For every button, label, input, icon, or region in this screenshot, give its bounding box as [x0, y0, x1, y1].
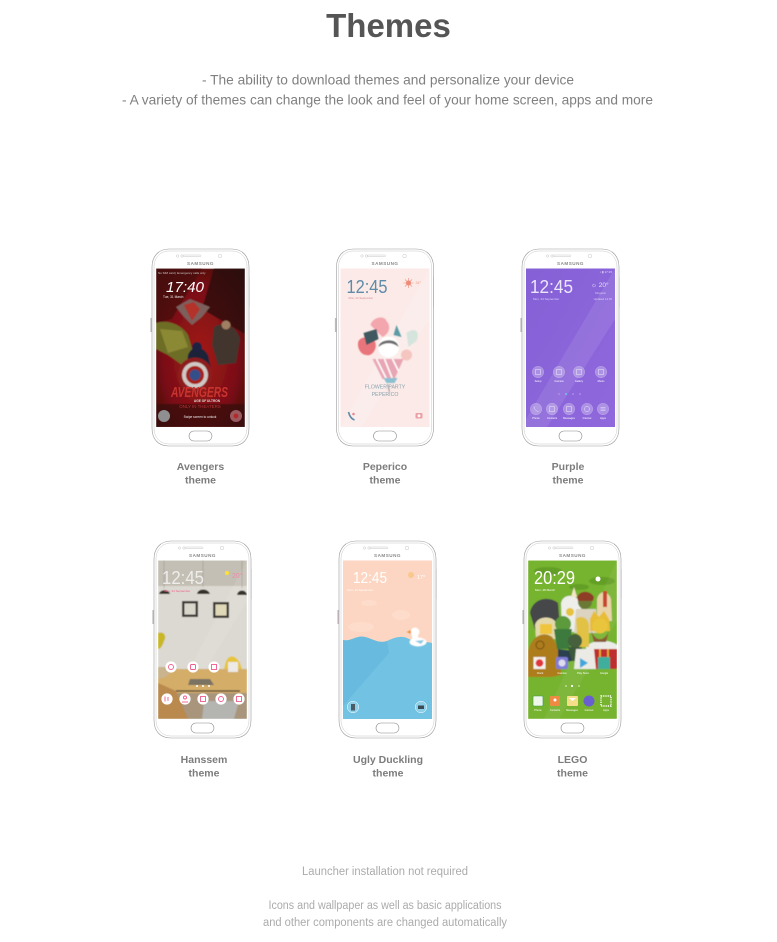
label: Purple theme: theme: [553, 474, 584, 486]
phone: Avengers theme: Swipe screen to unlock: [184, 415, 217, 419]
phone: Purple theme: Internet: [583, 416, 592, 420]
label: Avengers theme: Avengers: [177, 461, 224, 473]
intro text: - The ability to download themes and personalize your device: [202, 72, 574, 88]
grey robot: [530, 599, 560, 633]
intro text: - A variety of themes can change the look and feel of your home screen, apps and more: [122, 92, 653, 108]
phone: Purple theme: Camera: [554, 379, 564, 383]
phone: Hanssem theme: SAMSUNG: [189, 553, 216, 558]
phone: Peperico theme: FLOWER PARTY: [365, 384, 406, 390]
phone: Avengers theme: ONLY IN THEATERS: [179, 404, 221, 409]
bishop: [597, 592, 612, 621]
phone: Purple theme: Updated 14:45: [594, 297, 612, 301]
footer note: launcher: Launcher installation not required: [302, 866, 468, 878]
phone: LEGO theme: Messages: [566, 708, 579, 712]
phone: Peperico theme: SAMSUNG: [372, 261, 398, 266]
phone: LEGO theme: Contacts: [550, 708, 561, 712]
phone: Ugly Duckling theme: [337, 541, 436, 738]
phone: Ugly Duckling theme: 17°: [417, 575, 425, 581]
phone: Peperico theme: Mon, 24 September: [348, 296, 373, 300]
phone: Purple theme: Kingston: [595, 291, 606, 295]
phone: Hanssem theme: Mon, 24 September: [164, 589, 190, 593]
phone: Purple theme: Gallery: [575, 379, 584, 383]
label: Peperico theme: theme: [370, 474, 401, 486]
king: [585, 640, 617, 650]
unicorn: [561, 596, 582, 633]
phone: LEGO theme: Camera: [557, 671, 567, 675]
phone: Avengers theme: No SIM card | Emergency calls only: [158, 271, 206, 275]
label: Hanssem theme: theme: [189, 768, 220, 780]
phone: Purple theme: Apps: [600, 416, 607, 420]
phone: Hanssem theme: 12:45: [162, 567, 204, 588]
label: Ugly Duckling theme: Ugly Duckling: [353, 754, 423, 766]
phone: Avengers theme: AGE OF ULTRON: [194, 399, 221, 403]
footer note: components: [263, 900, 507, 929]
phone: LEGO theme: 20:29: [534, 567, 575, 588]
title: Themes: [326, 7, 451, 44]
footer note: components: Icons and wallpaper as well as basic applications: [268, 900, 502, 912]
phone: Ugly Duckling theme: 12:45: [353, 570, 387, 587]
phone: Peperico theme: 34°: [416, 281, 421, 285]
phone: LEGO theme: [522, 541, 622, 738]
phone: LEGO theme: Mon, 28 March: [535, 588, 555, 592]
pharaoh: [535, 618, 557, 639]
label: LEGO theme: LEGO: [558, 754, 587, 766]
phone: Hanssem theme: [152, 541, 252, 738]
centre figures: [576, 617, 589, 647]
footer note: components: and other components are changed automatically: [263, 917, 507, 929]
phone: Avengers theme: Tue, 31 March: [163, 295, 184, 299]
phone: Avengers theme: SAMSUNG: [187, 261, 214, 266]
phone: LEGO theme: Phone: [534, 708, 542, 712]
phone: Hanssem theme: 20°: [232, 572, 243, 580]
phone: Purple theme: [520, 249, 620, 446]
label: Peperico theme: Peperico: [363, 461, 407, 473]
intro text: [122, 72, 653, 108]
phone: Avengers theme: [150, 249, 250, 446]
phone: Purple theme: ▪ ▮ 17:15: [600, 270, 612, 274]
phone: LEGO theme: Play Store: [577, 671, 590, 675]
phone: Purple theme: Music: [598, 379, 605, 383]
phone: Avengers theme: 17:40: [166, 279, 205, 296]
phone: Purple theme: Contacts: [547, 416, 558, 420]
app icons: [534, 657, 546, 669]
label: Ugly Duckling theme: theme: [373, 768, 404, 780]
phone: Purple theme: Setup: [535, 379, 542, 383]
green ghost: [555, 616, 571, 632]
phone: Purple theme: SAMSUNG: [557, 261, 584, 266]
phone: Purple theme: Mon, 24 September: [533, 297, 559, 301]
goblin: [578, 600, 592, 610]
phone: Purple theme: ☼ 20°: [591, 281, 609, 289]
phone: Peperico theme: PEPERICO: [372, 392, 398, 398]
label: LEGO theme: theme: [557, 768, 588, 780]
label: Avengers theme: theme: [185, 474, 216, 486]
phone: Peperico theme: [335, 249, 434, 446]
phone: LEGO theme: Apps: [603, 708, 610, 712]
phone: LEGO theme: Clock: [537, 671, 544, 675]
phone: LEGO theme: Internet: [585, 708, 594, 712]
phone: Purple theme: Phone: [532, 416, 540, 420]
phone: Ugly Duckling theme: Mon, 24 September: [347, 588, 373, 592]
phone: LEGO theme: SAMSUNG: [559, 553, 586, 558]
phone: Purple theme: 12:45: [530, 276, 573, 297]
phone: Peperico theme: 12:45: [346, 277, 388, 297]
phone: LEGO theme: Google: [600, 671, 609, 675]
phone: Ugly Duckling theme: SAMSUNG: [374, 553, 401, 558]
phone: Avengers theme: AVENGERS: [170, 384, 228, 401]
label: Purple theme: Purple: [552, 461, 584, 473]
phone: Purple theme: Messages: [563, 416, 576, 420]
label: Hanssem theme: Hanssem: [181, 754, 227, 766]
